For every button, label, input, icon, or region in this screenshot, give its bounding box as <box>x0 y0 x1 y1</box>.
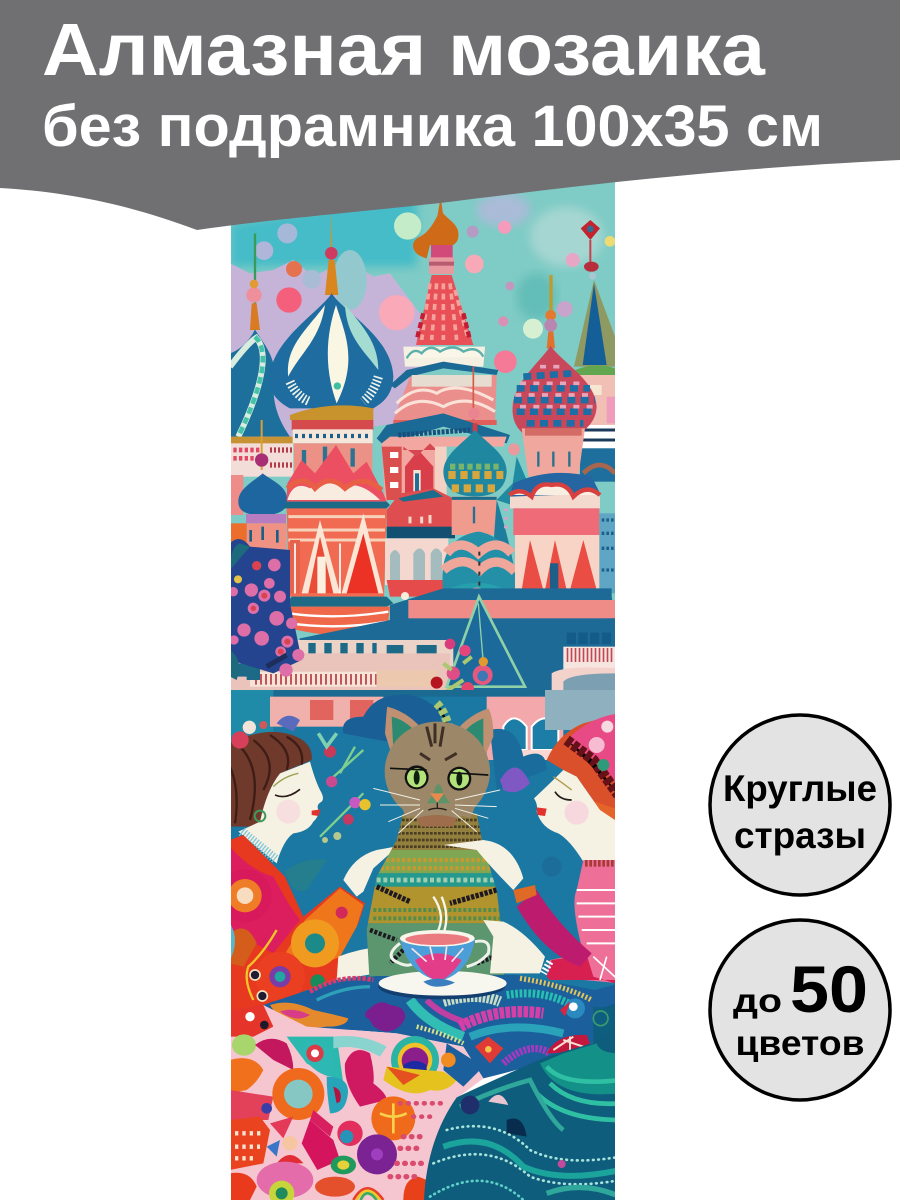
teacup with steam <box>391 897 489 987</box>
badge: up to 50 colors: до <box>733 982 782 1019</box>
floating circles <box>255 212 615 373</box>
right checkered dome <box>513 275 597 477</box>
deep blue backdrop <box>230 690 620 1030</box>
central green dome <box>437 367 527 597</box>
painting: cathedral, women and cat <box>218 180 620 1200</box>
left cropped dome <box>230 233 293 515</box>
left large drum <box>283 445 393 636</box>
upper painting: cathedral <box>229 180 620 700</box>
woman on the right <box>443 713 620 985</box>
saucer <box>378 971 507 999</box>
badge: round rhinestones: Круглые <box>723 768 877 809</box>
badge: round rhinestones: стразы <box>734 815 866 856</box>
blue-green leaf pattern <box>285 747 371 891</box>
central section with arched windows <box>385 488 455 600</box>
lower blue roof and wall <box>230 588 617 700</box>
header banner <box>0 0 900 230</box>
central tent tower <box>377 197 510 500</box>
flower tree <box>229 539 304 680</box>
badge: up to 50 colors: 50 <box>790 952 868 1026</box>
title: Алмазная мозаика <box>42 8 766 91</box>
colorful lower left pattern <box>230 1005 483 1200</box>
small left blue dome <box>230 420 287 552</box>
badge: round rhinestones <box>710 715 890 895</box>
right tent spire <box>574 220 615 482</box>
teal dress, lower right <box>424 1038 615 1200</box>
badge: up to 50 colors <box>710 920 890 1100</box>
cat in patterned sweater <box>363 707 510 977</box>
big blue onion dome <box>269 210 393 487</box>
flower bouquet <box>431 639 474 695</box>
lower painting: women, cat, tablecloth <box>218 690 620 1200</box>
center blue tent <box>447 597 525 687</box>
woman on the left <box>231 720 393 1010</box>
right large drum <box>509 473 615 593</box>
subtitle: без подрамника 100х35 см <box>42 94 823 159</box>
tablecloth with paisley <box>263 975 620 1078</box>
badge: up to 50 colors: цветов <box>736 1024 864 1063</box>
watercolor sky <box>231 182 615 640</box>
